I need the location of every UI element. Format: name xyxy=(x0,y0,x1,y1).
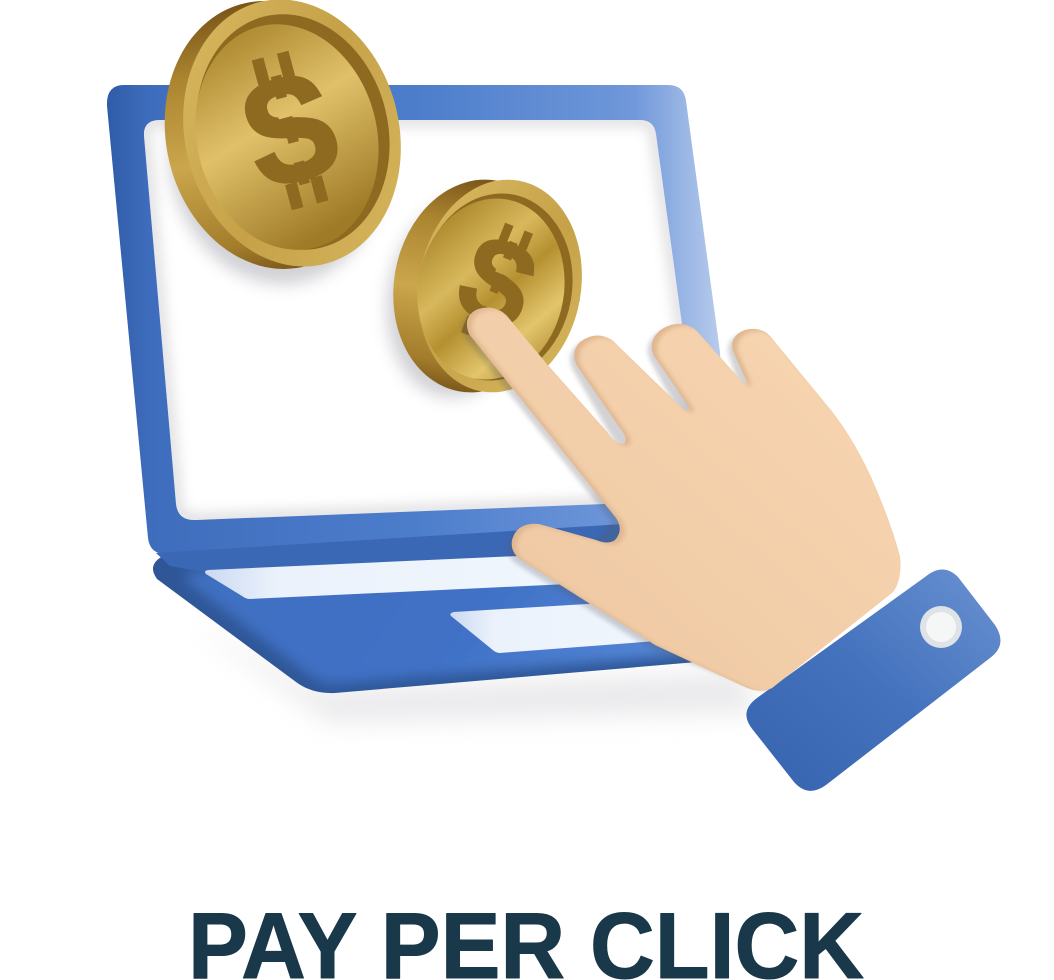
laptop base xyxy=(153,525,720,693)
laptop screen xyxy=(144,120,689,520)
icon: pointing hand xyxy=(467,308,905,693)
laptop hinge band xyxy=(156,523,640,572)
dollar sign: $ xyxy=(226,35,354,224)
laptop lid xyxy=(107,85,730,554)
laptop shadow xyxy=(190,620,760,722)
trackpad xyxy=(450,602,670,653)
cuff button xyxy=(920,606,962,648)
dollar sign xyxy=(459,222,534,336)
icon: large dollar coin xyxy=(164,0,401,269)
icon: laptop xyxy=(107,85,740,693)
dollar sign xyxy=(244,50,338,210)
hand shadow xyxy=(463,312,896,692)
icon: shirt cuff xyxy=(746,570,1000,791)
coin shadows xyxy=(146,16,548,409)
icon: small dollar coin xyxy=(393,180,582,392)
keyboard xyxy=(205,555,568,599)
dollar sign: $ xyxy=(440,206,554,358)
